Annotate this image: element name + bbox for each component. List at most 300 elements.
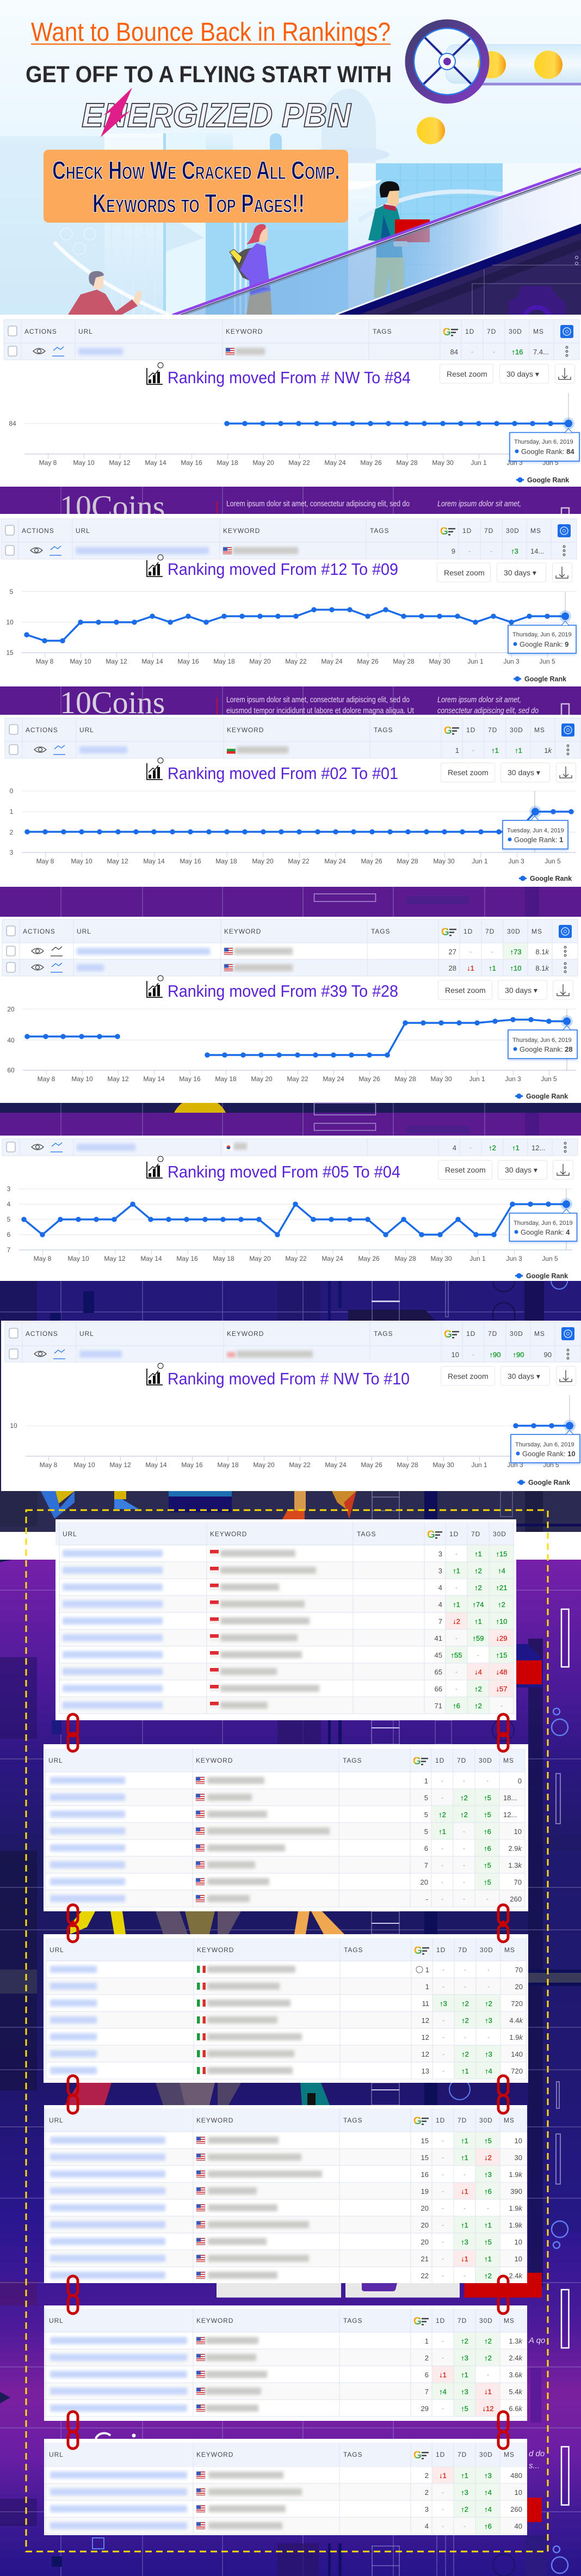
table rows: 70 <box>514 1878 522 1886</box>
line chart: May 10 <box>73 459 95 467</box>
line chart: May 22 <box>285 658 307 665</box>
table rows: ↑2 <box>461 2000 469 2008</box>
table rows <box>45 1777 525 1907</box>
decor: right side outlines and rings: s... <box>529 2461 540 2470</box>
purple band 2 with 10Coins: eiusmod tempor incididunt ut labore et dolore magna aliqua. Ut <box>226 706 415 715</box>
table header: MS <box>504 2317 515 2324</box>
table rows: 6 <box>425 2371 429 2379</box>
table row: - <box>472 1351 474 1358</box>
table rows: 66 <box>435 1685 442 1693</box>
purple band 2 with 10Coins: 10Coins <box>60 685 165 720</box>
table rows: 5 <box>424 1811 428 1819</box>
line chart: May 12 <box>104 1255 126 1262</box>
table rows: ↓1 <box>461 2187 468 2195</box>
table rows: ↓1 <box>461 2255 468 2263</box>
purple band 2 with 10Coins: consectetur adipiscing elit, sed do <box>437 706 539 715</box>
tooltip: Thursday, Jun 6, 2019 <box>514 439 573 445</box>
table row <box>1 542 577 559</box>
table header: G <box>413 2450 422 2461</box>
table rows: - <box>442 2016 444 2024</box>
table rows: - <box>463 2522 466 2530</box>
purple band 1: Lorem ipsum dolor sit amet, consectetur adipiscing elit, sed do <box>226 499 410 508</box>
table rows: 20 <box>421 2238 429 2246</box>
table rows: ↑1 <box>461 2067 469 2075</box>
table rows: - <box>464 2033 466 2041</box>
table rows: ↑4 <box>439 2388 447 2396</box>
table header: TAGS <box>357 1530 376 1538</box>
tooltip: Thursday, Jun 6, 2019 <box>512 1037 572 1044</box>
table rows: - <box>442 2522 444 2530</box>
table row: - <box>471 348 473 355</box>
table rows: ↑3 <box>485 2050 492 2058</box>
table rows: - <box>463 1827 465 1835</box>
table row <box>5 741 580 758</box>
purple band 2 with 10Coins: Lorem ipsum dolor sit amet, <box>437 695 521 704</box>
line chart: May 26 <box>361 1461 382 1469</box>
table header: MS <box>504 1946 515 1954</box>
table header: TAGS <box>343 2117 362 2124</box>
line chart: May 28 <box>396 459 418 467</box>
line chart: May 18 <box>217 1461 239 1469</box>
table rows: ↓2 <box>453 1617 460 1626</box>
table rows: ↑5 <box>484 1861 491 1869</box>
table row: 1k <box>544 746 553 755</box>
line chart: Jun 5 <box>542 459 559 467</box>
table rows: 29 <box>421 2405 429 2413</box>
heading: Ranking moved From #05 To #04 <box>168 1162 400 1181</box>
table rows: ↑2 <box>498 1600 505 1609</box>
table header: 30D <box>507 928 521 935</box>
table rows: 10 <box>515 2488 522 2497</box>
table rows: ↑1 <box>474 1617 482 1626</box>
chart controls: Reset zoom <box>448 1372 489 1381</box>
line chart: May 22 <box>285 1255 307 1262</box>
line chart: May 28 <box>397 1461 418 1469</box>
table rows: - <box>463 1861 465 1869</box>
table row: 8.1k <box>535 964 549 972</box>
person: man waving <box>68 271 141 315</box>
line chart <box>10 787 576 865</box>
line chart: May 8 <box>36 658 54 665</box>
chart controls: 30 days ▾ <box>508 1372 540 1381</box>
table rows: ↓1 <box>439 2471 447 2480</box>
table rows: ↑21 <box>496 1584 507 1592</box>
table rows: 11 <box>422 2000 429 2008</box>
table rows: ↑2 <box>484 2354 492 2362</box>
table rows: ↓2 <box>484 2154 492 2162</box>
table rows: 10 <box>514 1827 522 1836</box>
line chart: Jun 5 <box>545 857 561 865</box>
table rows: 5 <box>424 1827 428 1836</box>
table rows: - <box>477 1651 479 1659</box>
table rows: 4 <box>438 1600 442 1609</box>
table header: KEYWORD <box>196 2117 233 2124</box>
table rows: 2 <box>425 2354 429 2362</box>
table rows: - <box>463 1844 465 1852</box>
table row: 27 <box>449 948 456 956</box>
line chart: May 14 <box>140 1255 162 1262</box>
table rows: 260 <box>510 2505 522 2513</box>
table rows: 6 <box>424 1844 428 1853</box>
table header: G <box>414 1945 422 1956</box>
hero banner <box>0 0 581 316</box>
table rows: 10 <box>515 2238 522 2246</box>
line chart: May 30 <box>430 1255 452 1262</box>
line chart: Jun 1 <box>472 857 488 865</box>
tooltip: Google Rank: 28 <box>520 1045 573 1053</box>
person: man with folder <box>368 181 430 298</box>
line chart: 20 <box>7 1005 15 1013</box>
table row: 7.4... <box>533 348 549 356</box>
table header <box>4 320 579 343</box>
table rows: - <box>455 1550 458 1557</box>
table rows: ↑2 <box>474 1584 482 1592</box>
table rows: 480 <box>510 2471 522 2480</box>
table header: 7D <box>488 1330 497 1338</box>
table rows: 720 <box>511 2067 523 2075</box>
table rows: 40 <box>515 2522 522 2530</box>
table rows: 5 <box>424 1794 428 1802</box>
table header: 1D <box>436 1946 446 1954</box>
line chart: Jun 1 <box>469 1255 486 1262</box>
table header: 30D <box>510 726 523 734</box>
table rows: - <box>463 1878 465 1886</box>
table header: 30D <box>479 1757 492 1764</box>
table rows: - <box>442 2221 444 2229</box>
table rows: ↑3 <box>484 2170 492 2179</box>
table: us keywords b <box>44 2105 527 2283</box>
line chart: May 14 <box>145 459 166 467</box>
table header: URL <box>49 2117 64 2124</box>
table header: KEYWORD <box>210 1530 247 1538</box>
table header: MS <box>531 928 542 935</box>
table header: TAGS <box>343 1757 362 1764</box>
table rows: 2 <box>425 2471 429 2480</box>
table rows: 0 <box>518 1777 522 1785</box>
table row: 9 <box>452 547 455 555</box>
table rows: - <box>486 1895 489 1903</box>
table rows: ↑2 <box>461 2505 468 2513</box>
heading <box>147 758 398 783</box>
table rows: - <box>463 1895 465 1903</box>
table header <box>5 718 580 741</box>
table rows: 16 <box>421 2170 429 2179</box>
line chart: May 12 <box>109 1461 131 1469</box>
table row: - <box>490 547 492 555</box>
table rows: - <box>442 2170 444 2178</box>
table rows: ↑1 <box>453 1600 460 1609</box>
table row <box>4 343 579 360</box>
icon: wheel <box>410 24 485 99</box>
table rows: - <box>442 2238 444 2246</box>
table header: TAGS <box>373 328 392 335</box>
line chart: May 28 <box>393 658 415 665</box>
line chart: May 26 <box>359 1075 380 1083</box>
line chart: May 10 <box>71 857 92 865</box>
table rows: - <box>455 1685 458 1692</box>
table rows: 20 <box>421 2221 429 2229</box>
table rows: 30 <box>515 2154 522 2162</box>
line chart: May 26 <box>358 1255 380 1262</box>
table: report 6 <box>5 1322 580 1362</box>
table rows: 20 <box>515 1983 523 1991</box>
table row: - <box>491 948 493 955</box>
icon: coin <box>417 117 445 144</box>
table rows: ↑3 <box>484 2471 492 2480</box>
table header <box>5 1322 580 1346</box>
chart controls <box>438 1161 573 1179</box>
line chart: Jun 5 <box>543 1461 559 1469</box>
line chart: Jun 3 <box>503 658 520 665</box>
tooltip: Thursday, Jun 6, 2019 <box>515 1442 574 1448</box>
table rows: ↑2 <box>484 2272 492 2280</box>
table header <box>1 519 577 542</box>
line chart: May 26 <box>361 857 382 865</box>
table rows: ↑2 <box>474 1567 482 1575</box>
table header: KEYWORD <box>196 1757 233 1764</box>
line chart: May 12 <box>107 1075 129 1083</box>
table rows: 12 <box>422 2050 429 2058</box>
table rows: ↑6 <box>484 1827 491 1836</box>
table header: 7D <box>471 1530 480 1538</box>
table rows: ↑1 <box>474 1550 482 1558</box>
table rows: 140 <box>511 2050 523 2058</box>
table: report 5: - <box>469 1144 472 1151</box>
line chart: Jun 3 <box>508 857 524 865</box>
table rows: ↑3 <box>440 2000 447 2008</box>
line chart: Jun 1 <box>471 1461 487 1469</box>
table row: ↑1 <box>491 746 499 755</box>
table header <box>46 1938 526 1961</box>
table rows: ↑2 <box>474 1685 482 1693</box>
table rows: ↑2 <box>461 2016 469 2025</box>
line chart: May 22 <box>288 857 310 865</box>
chart controls: 30 days ▾ <box>505 1166 537 1174</box>
table: hair transplant keywords <box>44 2439 527 2535</box>
line chart: May 10 <box>67 1255 89 1262</box>
table rows: ↑59 <box>473 1634 484 1642</box>
table rows: ↑2 <box>474 1702 482 1710</box>
table: report 1 <box>4 320 579 360</box>
table rows: 1.3k <box>509 2337 523 2345</box>
legend: Google Rank <box>526 1093 568 1100</box>
tooltip <box>509 1209 577 1241</box>
table header: MS <box>504 2117 515 2124</box>
table rows: ↑5 <box>484 1794 491 1802</box>
table row: 28 <box>449 964 456 972</box>
table header: G <box>413 2115 422 2127</box>
line chart: May 12 <box>109 459 131 467</box>
escalator <box>172 169 581 316</box>
table rows: - <box>442 2067 444 2075</box>
table rows: 4 <box>438 1584 442 1592</box>
table row <box>7 943 566 959</box>
table rows: ↑1 <box>461 2471 468 2480</box>
title: want to bounce back: Want to Bounce Back in Rankings? <box>31 18 391 47</box>
tube <box>446 45 581 85</box>
table header: 1D <box>462 527 472 535</box>
table rows: 1 <box>425 2337 429 2345</box>
line chart <box>10 1395 577 1469</box>
table header: 7D <box>484 527 493 535</box>
icon: coin <box>534 51 563 79</box>
table rows: 45 <box>435 1651 442 1659</box>
table header: G <box>413 2316 422 2327</box>
chart section 5 <box>7 1156 577 1280</box>
line chart: May 18 <box>213 658 235 665</box>
table rows: ↑2 <box>461 2050 469 2058</box>
table header: 7D <box>458 1946 467 1954</box>
purple band 2 with 10Coins: Lorem ipsum dolor sit amet, consectetur adipiscing elit, sed do <box>226 695 410 704</box>
table rows: - <box>442 2272 444 2279</box>
table rows: ↑1 <box>484 2221 492 2229</box>
table row: - <box>493 348 495 355</box>
table header: ACTIONS <box>26 726 58 734</box>
table header: URL <box>79 1330 94 1338</box>
table header <box>55 1522 514 1545</box>
table row: 1 <box>455 746 459 755</box>
table rows: ↑3 <box>485 2016 492 2025</box>
line chart: Jun 3 <box>506 1255 522 1262</box>
table rows: - <box>442 2204 444 2212</box>
chart controls: Reset zoom <box>445 1166 486 1174</box>
line chart: May 18 <box>215 1075 237 1083</box>
table header: TAGS <box>344 1946 363 1954</box>
table rows: ↑4 <box>498 1567 505 1575</box>
callout: orange box: Keywords to Top Pages!! <box>92 189 305 218</box>
line chart: 6 <box>7 1231 11 1238</box>
line chart <box>7 1185 572 1262</box>
tooltip: Google Rank: 84 <box>521 447 574 456</box>
line chart: Jun 5 <box>539 658 555 665</box>
chart controls <box>437 563 572 582</box>
table rows: 1 <box>425 1983 429 1991</box>
table: foot spa keywords <box>44 2305 527 2421</box>
table row: - <box>469 948 472 955</box>
table rows: ↑15 <box>496 1651 507 1659</box>
table header: KEYWORD <box>196 2451 233 2458</box>
table rows <box>46 1966 526 2079</box>
decor: bottom strip shapes <box>52 2535 547 2576</box>
line chart: Jun 5 <box>541 1075 557 1083</box>
table rows: 1.3k <box>508 1861 522 1869</box>
table header <box>44 2108 527 2132</box>
background buildings <box>0 89 581 315</box>
table rows: 3.6k <box>509 2371 523 2379</box>
table header: G <box>427 1529 435 1541</box>
line chart: Jun 3 <box>506 459 523 467</box>
legend: Google Rank <box>524 675 566 683</box>
table row: ↑90 <box>490 1351 500 1359</box>
table rows: - <box>442 2488 444 2496</box>
table header: KEYWORD <box>227 1330 264 1338</box>
table rows: 7 <box>425 2388 429 2396</box>
white report sheet 3 <box>0 715 581 887</box>
decor: grid lines <box>0 1590 581 2576</box>
chart controls <box>440 364 574 383</box>
table rows: 20 <box>421 2204 429 2212</box>
table header: G <box>444 1329 452 1340</box>
line chart: May 14 <box>145 1461 167 1469</box>
line chart: May 26 <box>360 459 382 467</box>
table header: MS <box>530 527 541 535</box>
line chart: May 12 <box>107 857 128 865</box>
heading <box>147 363 411 387</box>
table: report 5: ↑2 <box>489 1144 496 1152</box>
table rows: ↑6 <box>484 2187 492 2195</box>
table header: 30D <box>480 1946 493 1954</box>
dark figures strip <box>0 1491 581 1532</box>
legend: Google Rank <box>527 476 569 484</box>
line chart: May 10 <box>73 1461 95 1469</box>
table header: URL <box>63 1530 77 1538</box>
chart controls <box>441 763 576 782</box>
table header: MS <box>533 328 544 335</box>
table: us keywords a <box>44 1744 528 1911</box>
table header: TAGS <box>343 2451 362 2458</box>
line chart: May 14 <box>141 658 163 665</box>
table rows: - <box>486 1777 489 1784</box>
chart section 2 <box>6 555 576 683</box>
table: report 5: 4 <box>453 1144 456 1152</box>
line chart: May 30 <box>433 857 455 865</box>
table rows: ↑6 <box>484 2522 492 2530</box>
table row: 90 <box>544 1351 552 1359</box>
table rows: 12... <box>503 1811 517 1819</box>
table rows: - <box>463 2272 466 2279</box>
heading: Ranking moved From #12 To #09 <box>168 560 398 579</box>
chart controls: Reset zoom <box>448 768 489 777</box>
table rows: 7 <box>438 1617 442 1626</box>
table row: ↑16 <box>512 348 523 356</box>
table rows: 4 <box>425 2522 429 2530</box>
table: report 3 <box>5 718 580 758</box>
tooltip: Thursday, Jun 6, 2019 <box>514 1220 573 1226</box>
table rows: 19 <box>421 2187 429 2195</box>
white report sheet 1 <box>0 315 581 487</box>
table rows: - <box>487 2204 489 2212</box>
chart controls: 30 days ▾ <box>505 986 537 995</box>
tooltip <box>508 1026 577 1058</box>
line chart: May 10 <box>70 658 91 665</box>
tooltip <box>510 428 579 461</box>
tooltip: Google Rank: 9 <box>520 640 568 648</box>
table: report 5: ↑1 <box>512 1144 520 1152</box>
table rows: ↑2 <box>460 1811 468 1819</box>
line chart: May 16 <box>180 857 201 865</box>
tooltip <box>503 816 568 849</box>
table rows: ↑5 <box>484 2238 492 2246</box>
table header: 7D <box>458 2451 467 2458</box>
table rows: ↓57 <box>496 1685 507 1693</box>
line chart: 15 <box>6 649 14 657</box>
line chart: May 22 <box>287 1075 308 1083</box>
line chart: 3 <box>7 1185 11 1193</box>
table header: TAGS <box>374 726 393 734</box>
line chart <box>9 393 574 467</box>
table rows: ↑5 <box>484 1878 491 1886</box>
table header: G <box>443 327 451 338</box>
table rows: - <box>441 1777 443 1784</box>
legend: Google Rank <box>526 1272 568 1280</box>
heading <box>147 1156 400 1181</box>
table rows: - <box>463 1777 465 1784</box>
callout: orange box: Check How We Cracked All Comp. <box>52 156 340 185</box>
heading: Ranking moved From # NW To #84 <box>168 368 411 387</box>
table rows: 1.9k <box>509 2033 523 2041</box>
tooltip: Google Rank: 1 <box>514 836 563 844</box>
table rows: 5.4k <box>509 2388 523 2396</box>
